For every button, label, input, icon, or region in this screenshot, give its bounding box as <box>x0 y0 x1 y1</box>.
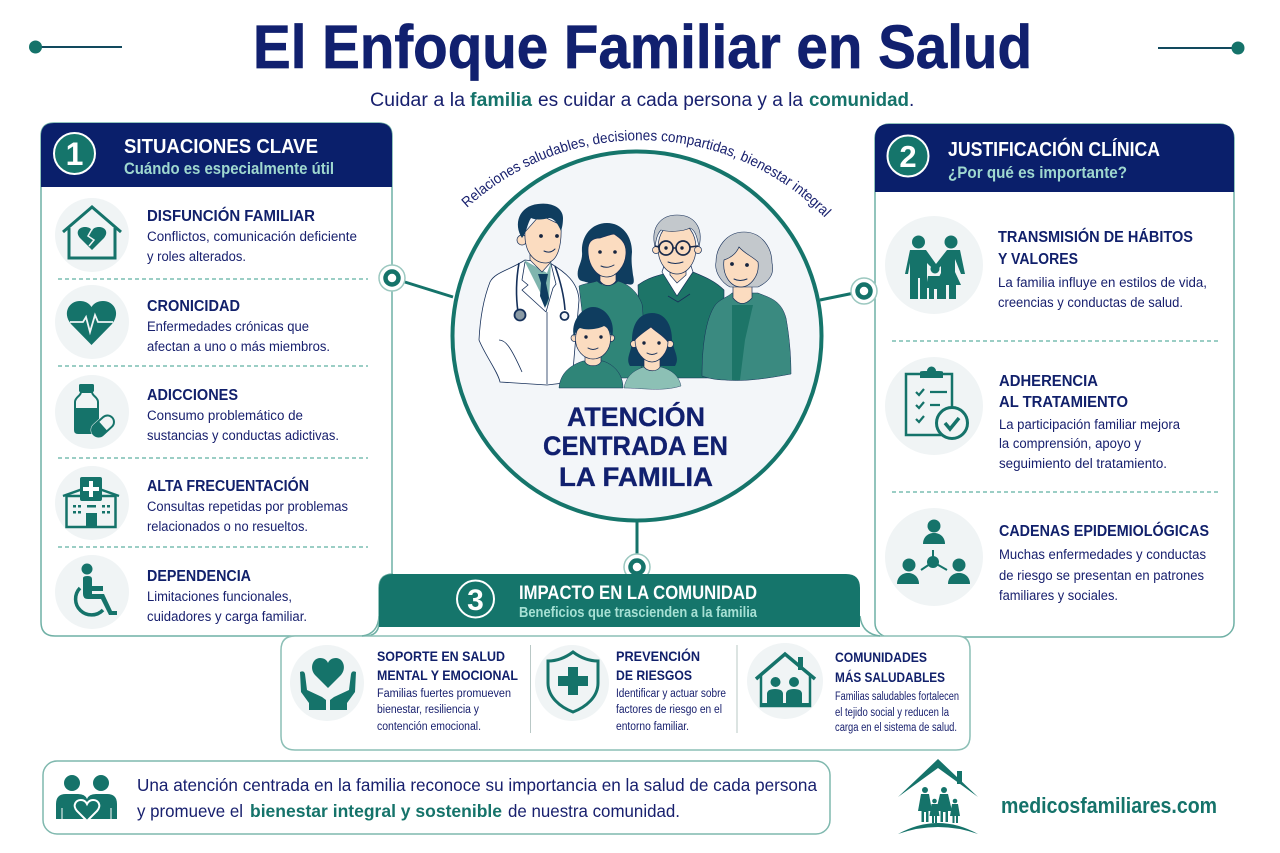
item: soporte en salud mental: SOPORTE EN SALUD <box>377 648 505 664</box>
header: situaciones clave: Cuándo es especialmente útil <box>124 159 334 178</box>
item: dependencia: DEPENDENCIA <box>147 568 251 585</box>
item: adherencia al tratamiento: seguimiento del tratamiento. <box>999 456 1167 471</box>
item: soporte en salud mental: MENTAL Y EMOCIONAL <box>377 667 518 683</box>
connector node right <box>851 278 877 304</box>
item: comunidades más saludables: Familias saludables fortalecen <box>835 691 959 703</box>
item: prevención de riesgos: entorno familiar. <box>616 721 689 733</box>
grandfather <box>638 215 724 378</box>
panel: situaciones clave <box>41 123 393 636</box>
callout text <box>137 775 817 821</box>
item: cronicidad: CRONICIDAD <box>147 298 240 315</box>
curved tagline: Relaciones saludables, decisiones compartidas, bienestar integral <box>461 130 832 218</box>
item: cadenas epidemiológicas: de riesgo se presentan en patrones <box>999 568 1204 583</box>
item: cadenas epidemiológicas: familiares y sociales. <box>999 588 1118 603</box>
header: justificación clínica <box>875 124 1234 192</box>
icon: house with family <box>898 759 978 834</box>
header: situaciones clave: SITUACIONES CLAVE <box>124 136 318 158</box>
subtitle: familia <box>470 90 532 111</box>
item: adicciones: sustancias y conductas adictivas. <box>147 428 339 443</box>
subtitle: comunidad <box>809 90 909 111</box>
item: cronicidad <box>55 285 330 359</box>
website text: medicosfamiliares.com <box>1001 793 1217 818</box>
decorative title line left <box>29 40 122 54</box>
item: prevención de riesgos <box>535 645 726 733</box>
panel: justificación clínica <box>875 124 1234 637</box>
grandmother <box>702 232 791 381</box>
item: cronicidad: Enfermedades crónicas que <box>147 319 309 334</box>
header: situaciones clave: 1 <box>66 136 83 172</box>
item: comunidades más saludables <box>747 643 959 734</box>
central label: CENTRADA EN <box>543 431 728 461</box>
item: adherencia al tratamiento: la comprensión, apoyo y <box>999 436 1141 451</box>
callout text: Una atención centrada en la familia reconoce su importancia en la salud de cada persona <box>137 775 817 795</box>
item: disfunción familiar: Conflictos, comunicación deficiente <box>147 229 357 244</box>
item: adherencia al tratamiento: AL TRATAMIENTO <box>999 394 1128 411</box>
item: prevención de riesgos: factores de riesgo en el <box>616 704 722 716</box>
subtitle: Cuidar a la <box>370 90 465 111</box>
item: transmisión de hábitos <box>885 216 1207 314</box>
item: adherencia al tratamiento <box>885 357 1180 471</box>
item: soporte en salud mental <box>290 645 518 733</box>
logo: medicosfamiliares.com <box>898 759 1217 834</box>
title: El Enfoque Familiar en Salud <box>253 13 1032 81</box>
callout text: bienestar integral y sostenible <box>250 801 502 821</box>
item: dependencia: Limitaciones funcionales, <box>147 589 292 604</box>
illustration: doctor and family <box>479 204 791 389</box>
item: alta frecuentación: ALTA FRECUENTACIÓN <box>147 477 309 495</box>
item: prevención de riesgos: DE RIESGOS <box>616 667 692 683</box>
item: adherencia al tratamiento: La participación familiar mejora <box>999 417 1180 432</box>
callout text: de nuestra comunidad. <box>508 801 680 821</box>
item: comunidades más saludables: COMUNIDADES <box>835 649 927 665</box>
item: comunidades más saludables: MÁS SALUDABLES <box>835 669 945 685</box>
item: soporte en salud mental: contención emocional. <box>377 721 481 733</box>
header: impacto: IMPACTO EN LA COMUNIDAD <box>519 583 757 604</box>
icon: two people with heart <box>56 775 117 821</box>
header: justificación clínica: 2 <box>899 139 917 174</box>
header: impacto: Beneficios que trascienden a la familia <box>519 604 758 621</box>
item: disfunción familiar: DISFUNCIÓN FAMILIAR <box>147 207 315 225</box>
item: cronicidad: afectan a uno o más miembros. <box>147 339 330 354</box>
callout text: y promueve el <box>137 801 243 821</box>
item: cadenas epidemiológicas: CADENAS EPIDEMIOLÓGICAS <box>999 522 1209 540</box>
item: cadenas epidemiológicas: Muchas enfermedades y conductas <box>999 547 1206 562</box>
mother <box>578 223 643 378</box>
item: adicciones: ADICCIONES <box>147 387 238 404</box>
central label <box>543 401 728 492</box>
header: justificación clínica: JUSTIFICACIÓN CLÍNICA <box>948 137 1160 161</box>
subtitle: . <box>909 90 914 111</box>
item: soporte en salud mental: Familias fuertes promueven <box>377 688 511 700</box>
header: situaciones clave <box>41 123 392 187</box>
panel: impacto en la comunidad <box>281 574 970 750</box>
item: alta frecuentación: relacionados o no resueltos. <box>147 519 308 534</box>
item: disfunción familiar <box>55 198 357 272</box>
item: comunidades más saludables: carga en el sistema de salud. <box>835 722 957 734</box>
boy <box>559 307 623 388</box>
item: comunidades más saludables: el tejido social y reducen la <box>835 707 949 719</box>
central circle <box>450 130 832 522</box>
item: adicciones <box>55 375 339 449</box>
header: impacto <box>379 574 860 627</box>
item: alta frecuentación: Consultas repetidas por problemas <box>147 499 348 514</box>
item: transmisión de hábitos: creencias y conductas de salud. <box>998 295 1183 310</box>
subtitle <box>370 90 914 111</box>
item: transmisión de hábitos: TRANSMISIÓN DE HÁBITOS <box>998 228 1193 246</box>
bottom callout <box>43 761 830 834</box>
central label: ATENCIÓN <box>567 401 705 432</box>
item: alta frecuentación <box>55 466 348 540</box>
item: cadenas epidemiológicas <box>885 508 1209 606</box>
central label: LA FAMILIA <box>559 462 713 492</box>
item: transmisión de hábitos: La familia influye en estilos de vida, <box>998 275 1207 290</box>
item: adicciones: Consumo problemático de <box>147 408 303 423</box>
doctor <box>479 204 579 385</box>
item: adherencia al tratamiento: ADHERENCIA <box>999 373 1098 390</box>
item: dependencia: cuidadores y carga familiar. <box>147 609 307 624</box>
item: prevención de riesgos: PREVENCIÓN <box>616 647 700 664</box>
item: disfunción familiar: y roles alterados. <box>147 249 246 264</box>
item: prevención de riesgos: Identificar y actuar sobre <box>616 688 726 700</box>
item: dependencia <box>55 555 307 629</box>
item: transmisión de hábitos: Y VALORES <box>998 251 1078 268</box>
header: justificación clínica: ¿Por qué es importante? <box>948 163 1127 182</box>
girl <box>624 313 681 389</box>
subtitle: es cuidar a cada persona y a la <box>538 90 803 111</box>
decorative title line right <box>1158 42 1244 54</box>
connector node bottom <box>624 554 650 580</box>
connector node left <box>379 265 405 291</box>
item: soporte en salud mental: bienestar, resiliencia y <box>377 704 479 716</box>
header: impacto: 3 <box>467 584 484 617</box>
connector lines <box>392 278 864 558</box>
